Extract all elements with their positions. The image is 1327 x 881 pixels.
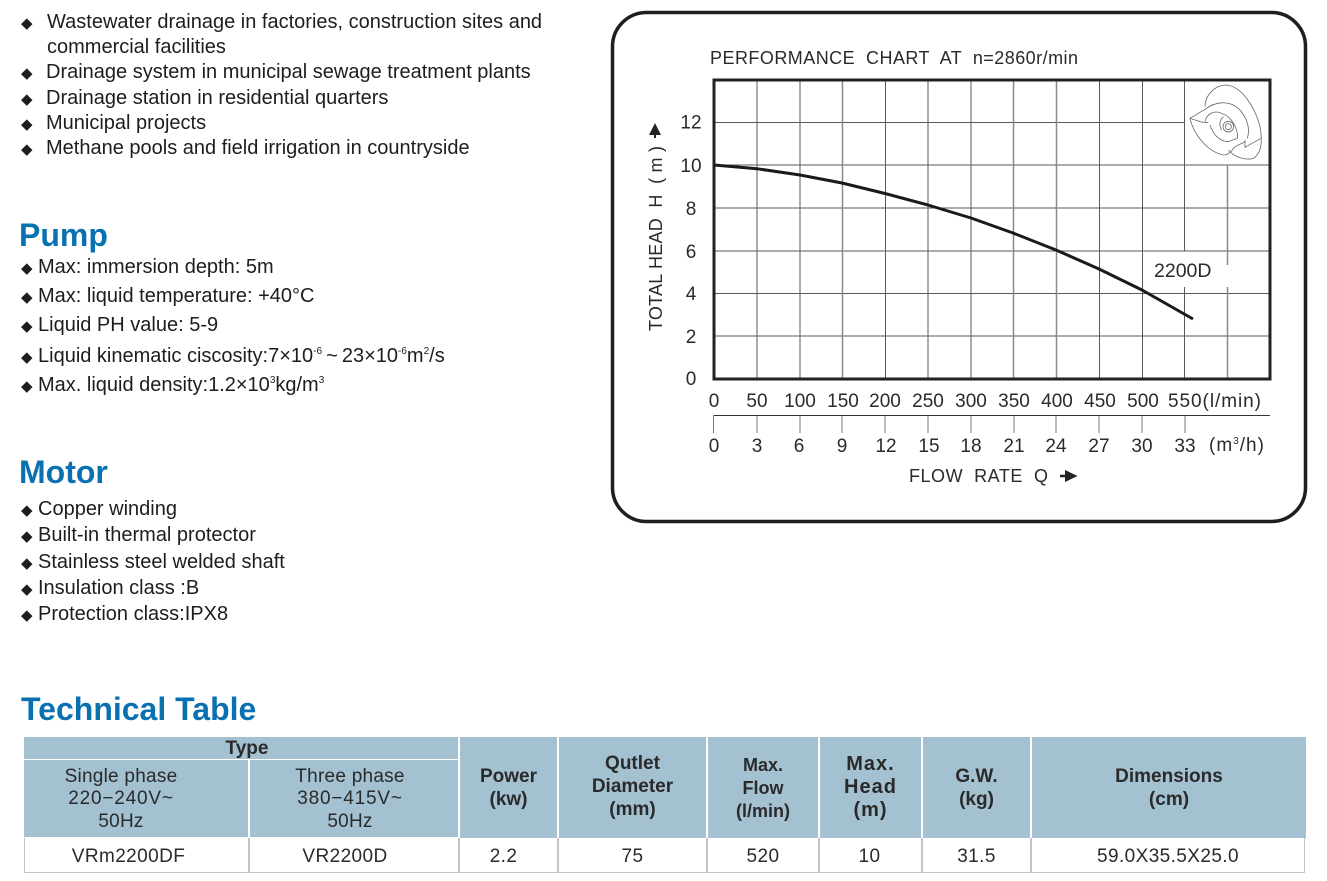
header: gross weight: (kg) — [959, 788, 994, 810]
header: three phase: 50Hz — [327, 811, 373, 832]
text block: application bullet list: ◆ — [21, 91, 33, 108]
text block: motor specification list: ◆ — [21, 502, 33, 519]
text block: application bullet list: ◆ — [21, 141, 33, 158]
heading: Motor: Motor — [19, 454, 108, 490]
flow axis m3/h: 3 — [752, 436, 762, 457]
text block: motor specification list: Stainless steel welded shaft — [38, 551, 285, 573]
value: gross weight — [923, 838, 1032, 872]
text block: pump specification list: Max. liquid density:1.2×103kg/m3 — [38, 374, 324, 396]
y axis values: 6 — [686, 242, 696, 263]
flow axis m3/h: 3 — [1233, 436, 1240, 447]
header: power: (kw) — [490, 788, 528, 810]
value: three phase model — [250, 838, 460, 872]
flow axis m3/h: 24 — [1045, 436, 1067, 457]
value: max flow: 520 — [747, 846, 779, 866]
header: dimensions: (cm) — [1149, 788, 1189, 810]
text block: motor specification list: Copper winding — [38, 498, 177, 520]
curve label: 2200D — [1154, 260, 1211, 282]
flow axis m3/h — [709, 435, 1265, 457]
text block: pump specification list: ◆ — [21, 318, 33, 335]
flow axis l/min: 300 — [955, 391, 987, 412]
flow scale rule — [714, 414, 1270, 416]
flow axis m3/h: 12 — [875, 436, 897, 457]
y axis values: 2 — [686, 327, 696, 348]
text block: application bullet list: Drainage system in municipal sewage treatment plants — [46, 61, 531, 83]
value: gross weight: 31.5 — [957, 846, 996, 866]
header: power — [460, 737, 557, 838]
value: single phase model: VRm2200DF — [72, 846, 185, 866]
header: three phase: Three phase — [295, 766, 405, 787]
data row — [24, 838, 1305, 873]
heading: Technical Table: Technical Table — [21, 691, 256, 727]
header: three phase: 380−415V~ — [297, 788, 403, 809]
flow axis m3/h: 18 — [960, 436, 982, 457]
header: max flow: (l/min) — [736, 801, 790, 821]
header: three phase — [250, 760, 458, 837]
y axis title: TOTAL HEAD H ( m ) — [646, 146, 666, 331]
text block: application bullet list: ◆ — [21, 15, 33, 32]
text block: pump specification list: Max: immersion depth: 5m — [38, 256, 274, 278]
value: power — [460, 838, 559, 872]
flow axis l/min: 100 — [784, 391, 816, 412]
chart title: PERFORMANCE CHART AT n=2860r/min — [710, 48, 1078, 68]
y axis values: 10 — [680, 156, 702, 177]
header: power: Power — [480, 766, 537, 786]
technical table — [24, 737, 1306, 873]
flow axis m3/h: 0 — [709, 436, 719, 457]
flow axis l/min: 550(l/min) — [1168, 391, 1261, 412]
text block: application bullet list: Wastewater drainage in factories, construction sites and — [47, 11, 542, 33]
text block: motor specification list: ◆ — [21, 528, 33, 545]
flow axis l/min: 150 — [827, 391, 859, 412]
header: outlet diameter: Qutlet — [605, 753, 660, 774]
text block: pump specification list: Liquid kinematic ciscosity:7×10-6 ~ 23×10-6m2/s — [38, 345, 445, 367]
performance curve 2200D — [714, 165, 1193, 319]
flow axis m3/h: 21 — [1003, 436, 1025, 457]
flow axis m3/h: 6 — [794, 436, 804, 457]
header: single phase: Single phase — [65, 766, 177, 787]
header: outlet diameter — [559, 737, 706, 838]
flow axis l/min: 0 — [709, 391, 719, 412]
header: type — [24, 737, 458, 759]
heading: Pump: Pump — [19, 217, 108, 253]
flow axis l/min: 250 — [912, 391, 944, 412]
text block: application bullet list: Methane pools and field irrigation in countryside — [46, 137, 470, 159]
text block: motor specification list: Built-in thermal protector — [38, 524, 256, 546]
flow axis l/min: 200 — [869, 391, 901, 412]
header: max flow — [708, 737, 818, 838]
text block: motor specification list: ◆ — [21, 581, 33, 598]
pump icon — [1190, 85, 1261, 159]
value: max head — [820, 838, 923, 872]
text block: pump specification list: ◆ — [21, 349, 33, 366]
value: three phase model: VR2200D — [302, 846, 388, 866]
y axis values: 12 — [680, 112, 702, 134]
header: outlet diameter: (mm) — [609, 799, 656, 820]
chart frame — [612, 12, 1306, 522]
y axis values: 8 — [686, 199, 696, 220]
flow axis m3/h: 27 — [1088, 436, 1110, 457]
header: type: Type — [226, 738, 268, 758]
flow axis m3/h: (m — [1209, 435, 1233, 456]
header: single phase — [24, 760, 248, 837]
text block: application bullet list: ◆ — [21, 116, 33, 133]
header: max head: (m) — [853, 799, 888, 821]
header: gross weight — [923, 737, 1030, 838]
header: max flow: Flow — [742, 778, 784, 798]
flow axis m3/h: /h) — [1240, 435, 1265, 456]
text block: pump specification list: ◆ — [21, 378, 33, 395]
flow axis l/min: 450 — [1084, 391, 1116, 412]
text block: motor specification list: Insulation class :B — [38, 577, 199, 599]
text block: pump specification list: ◆ — [21, 260, 33, 277]
value: max head: 10 — [859, 846, 880, 866]
header: single phase: 50Hz — [98, 811, 144, 832]
value: outlet diameter — [559, 838, 708, 872]
header: gross weight: G.W. — [955, 766, 998, 786]
flow axis l/min: 50 — [746, 391, 768, 412]
text block: application bullet list: Drainage station in residential quarters — [46, 87, 388, 109]
header: single phase: 220−240V~ — [68, 788, 174, 809]
y axis values: 4 — [686, 284, 697, 305]
flow axis m3/h: 30 — [1131, 436, 1153, 457]
flow axis l/min: 500 — [1127, 391, 1159, 412]
text block: motor specification list — [21, 498, 285, 625]
text block: motor specification list: Protection class:IPX8 — [38, 603, 228, 625]
value: power: 2.2 — [490, 846, 517, 866]
value: dimensions: 59.0X35.5X25.0 — [1097, 846, 1239, 866]
header: dimensions: Dimensions — [1115, 766, 1223, 786]
header: max flow: Max. — [743, 755, 783, 775]
text block: motor specification list: ◆ — [21, 555, 33, 572]
x axis title: FLOW RATE Q — [909, 466, 1048, 486]
plot border — [714, 80, 1270, 379]
value: max flow — [708, 838, 820, 872]
header: max head: Max. — [846, 753, 895, 775]
value: single phase model — [25, 838, 250, 872]
flow axis l/min: 350 — [998, 391, 1030, 412]
header: max head — [820, 737, 921, 838]
flow axis l/min — [709, 391, 1261, 412]
header: dimensions — [1032, 737, 1306, 838]
value: outlet diameter: 75 — [622, 846, 643, 866]
header: max head: Head — [844, 776, 897, 798]
text block: pump specification list — [21, 256, 445, 396]
text block: application bullet list: Municipal projects — [46, 112, 206, 134]
flow axis l/min: 400 — [1041, 391, 1073, 412]
text block: pump specification list: Liquid PH value: 5-9 — [38, 314, 218, 336]
text block: application bullet list: ◆ — [21, 65, 33, 82]
text block: pump specification list: Max: liquid temperature: +40°C — [38, 285, 314, 307]
header: outlet diameter: Diameter — [592, 776, 673, 797]
text block: application bullet list: commercial facilities — [47, 36, 226, 58]
text block: application bullet list — [21, 11, 542, 159]
flow axis m3/h: 9 — [837, 436, 847, 457]
y axis values — [680, 112, 702, 390]
text block: pump specification list: ◆ — [21, 289, 33, 306]
flow axis m3/h: 33 — [1174, 436, 1196, 457]
y axis values: 0 — [686, 369, 696, 390]
text block: motor specification list: ◆ — [21, 607, 33, 624]
flow axis m3/h: 15 — [918, 436, 940, 457]
plot grid — [714, 80, 1270, 379]
value: dimensions — [1032, 838, 1304, 872]
